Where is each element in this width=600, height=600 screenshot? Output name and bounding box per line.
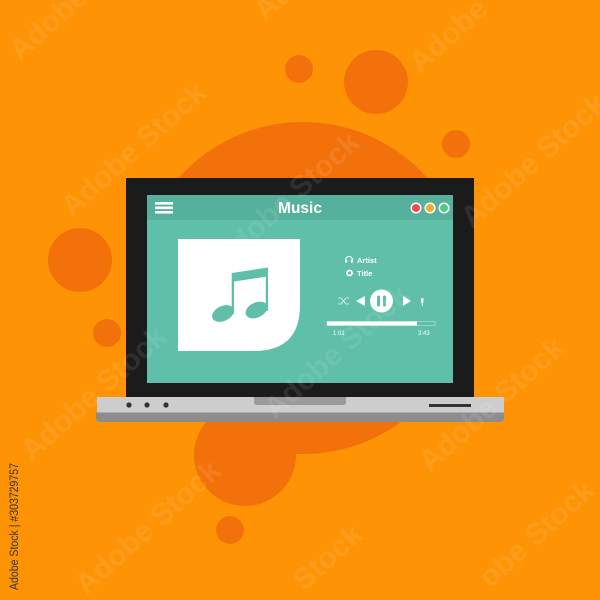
heading: Music: Music: [278, 200, 322, 217]
icon: disc: [347, 270, 352, 276]
watermarks: Adobe Stock: [15, 320, 173, 467]
stock id: Adobe Stock | #303729757: [9, 463, 21, 590]
trackpad notch: [254, 397, 346, 405]
icon: menu: [155, 202, 173, 214]
watermarks: Adobe Stock: [208, 126, 366, 273]
icon: microphone: [421, 298, 424, 306]
icon: next: [403, 296, 411, 306]
watermarks: obe Stock: [473, 474, 600, 594]
icon: pause button: [370, 290, 393, 312]
window buttons: [411, 203, 449, 213]
text: total time: 3:43: [418, 331, 430, 337]
icon: previous: [356, 296, 365, 306]
text: Artist: Artist: [357, 256, 377, 265]
icon: headphones: [345, 257, 353, 263]
laptop base: [97, 397, 504, 412]
text: Title: Title: [357, 269, 372, 278]
text: elapsed time: 1:01: [333, 331, 345, 337]
base lower edge: [96, 412, 504, 422]
header bar: [147, 195, 453, 220]
watermarks: Adobe Stock: [258, 278, 416, 425]
album cover: [178, 239, 300, 351]
screen: [147, 195, 453, 383]
watermarks: Adobe Stock: [413, 331, 571, 478]
laptop bezel: [126, 178, 474, 398]
background blobs: [48, 50, 470, 544]
watermarks: Adobe Stock: [69, 454, 227, 600]
progress bar: [327, 322, 435, 326]
icon: shuffle: [338, 298, 349, 304]
laptop: [96, 178, 504, 422]
icon: music note: [209, 268, 270, 325]
watermarks: Adobe Stock: [55, 76, 213, 223]
watermarks: Stock: [287, 518, 370, 597]
slot: [429, 404, 471, 407]
indicator lights: [126, 402, 169, 408]
